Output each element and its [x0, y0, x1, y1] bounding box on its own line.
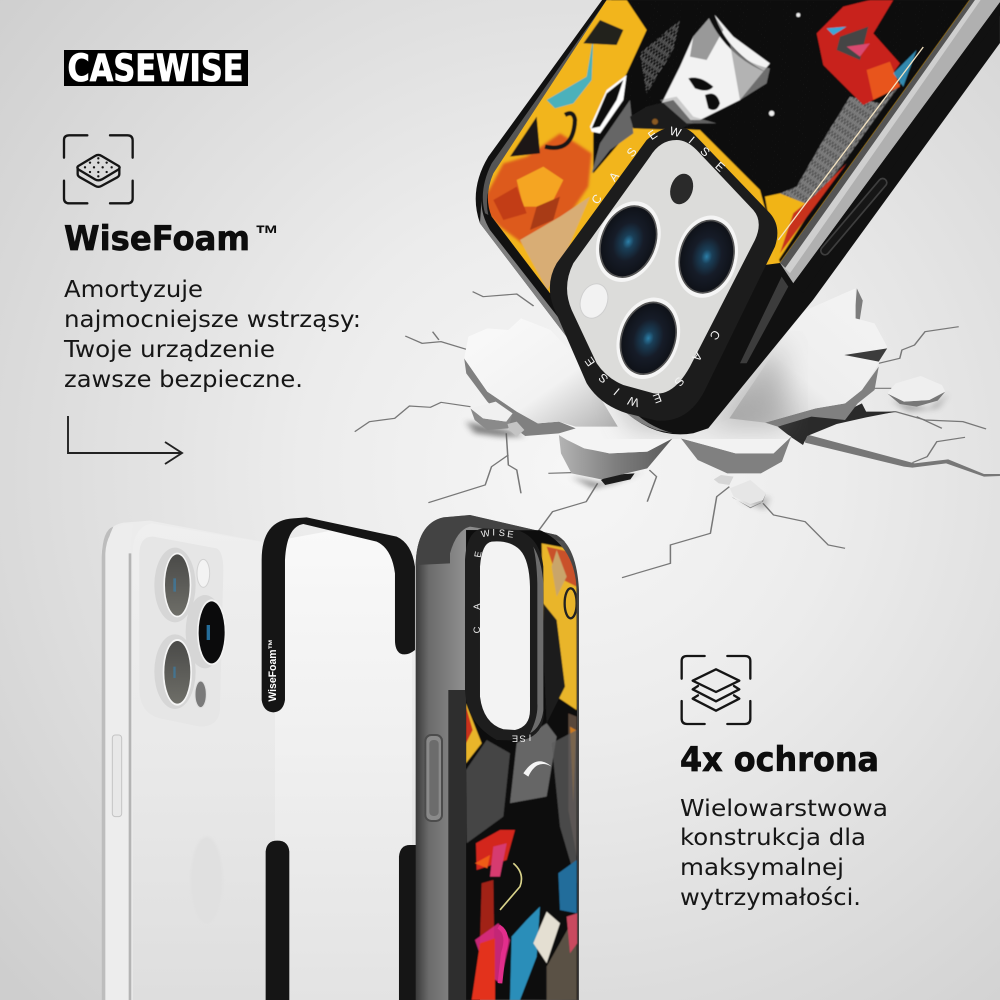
flash [197, 559, 210, 587]
ring lettering: W [480, 528, 491, 539]
heading: WiseFoam: ™ [255, 221, 279, 248]
camera opening [480, 541, 530, 730]
ring lettering: A [689, 349, 705, 364]
ring lettering: I [611, 385, 622, 398]
ring lettering: S [671, 374, 687, 389]
phone frame [102, 521, 277, 1000]
fur [466, 740, 510, 843]
yellow lower right [764, 192, 807, 260]
rocks: bottom [714, 475, 766, 508]
ring lettering: S [498, 528, 505, 538]
ring lettering: S [697, 144, 713, 160]
black glyphs [583, 20, 623, 45]
top colors [542, 543, 577, 710]
ring lettering: W [625, 393, 641, 410]
gorilla body [593, 0, 970, 263]
text block: WiseFoam description: Amortyzuje [64, 277, 203, 303]
ring lettering: E [651, 390, 663, 406]
sensor [195, 681, 206, 708]
crack lines [355, 292, 986, 578]
case body [476, 0, 1000, 434]
dark gap [778, 403, 896, 445]
camera ring [465, 528, 544, 741]
text block: 4x ochrona description [680, 796, 888, 911]
camera bump [139, 537, 223, 727]
ring lettering: C [707, 327, 723, 343]
ring lettering [472, 527, 531, 743]
slab: left [464, 318, 618, 436]
text block: WiseFoam description: Twoje urządzenie [63, 337, 275, 363]
lens: right [186, 595, 226, 668]
orange paint [480, 133, 592, 247]
ring lettering: C [588, 191, 605, 207]
text block: 4x ochrona description: konstrukcja dla [680, 825, 866, 851]
WiseFoam insert [262, 517, 418, 1000]
ring lettering: A [606, 169, 622, 184]
foam label: WiseFoam™ [267, 639, 279, 702]
text block: WiseFoam description: najmocniejsze wstrząsy: [64, 307, 361, 333]
side button [112, 735, 122, 817]
text block: 4x ochrona description: Wielowarstwowa [680, 796, 888, 822]
side bumper highlight [480, 197, 673, 433]
lens: bottom [606, 289, 690, 387]
black case, side view [416, 515, 579, 1000]
transparent case panel [275, 530, 412, 1000]
camera ring [550, 126, 777, 421]
heading: 4x ochrona: 4x ochrona [680, 740, 879, 780]
lower gloss [740, 277, 788, 363]
ring lettering: I [686, 134, 697, 146]
ring lettering: S [624, 145, 640, 160]
text block: WiseFoam description: zawsze bezpieczne. [64, 367, 303, 393]
logo: CASEWISE: CASEWISE [68, 47, 244, 90]
slab: right [729, 288, 887, 427]
gorilla face [660, 13, 770, 120]
arrow [68, 416, 182, 464]
phone back [133, 523, 277, 1000]
side button [825, 183, 883, 251]
red graffiti [817, 0, 900, 105]
white phone, back view [102, 521, 277, 1000]
ring lettering: A [472, 603, 482, 610]
slab: center right [681, 419, 791, 473]
artwork [460, 0, 973, 300]
text block: 4x ochrona description: maksymalnej [680, 855, 844, 881]
lens: lower [154, 634, 196, 709]
icon: stacked layers in scan frame [682, 656, 750, 724]
top phone with graffiti gorilla case [460, 0, 1000, 434]
ring lettering: E [582, 354, 598, 369]
slab: center left [559, 428, 673, 479]
lens: top left [584, 192, 672, 292]
black edge shade [793, 0, 1000, 293]
heading: WiseFoam: WiseFoam [64, 219, 250, 259]
side button [425, 735, 442, 821]
foam band top [262, 517, 415, 712]
graffiti [476, 830, 515, 870]
lens: upper [154, 548, 196, 622]
ring lettering [582, 124, 728, 410]
ring lettering: I [529, 732, 531, 742]
wedge crack [805, 434, 1000, 477]
grey side band [780, 0, 1000, 283]
case frame [416, 515, 579, 1000]
rock: right [887, 376, 945, 407]
phone shadow on wall [610, 340, 790, 430]
cracks in wall [355, 288, 1000, 578]
ring lettering: W [668, 124, 683, 140]
text block: WiseFoam description [63, 277, 361, 393]
ring lettering: E [507, 529, 514, 540]
lens: top right [667, 209, 746, 304]
tan paint [520, 197, 590, 290]
ring lettering: E [512, 733, 518, 743]
ring lettering: E [473, 551, 484, 558]
ring lettering: C [472, 626, 482, 633]
gorilla eye socket [590, 75, 627, 133]
flash [575, 280, 613, 322]
rock: left [470, 402, 524, 437]
ring lettering: S [596, 370, 611, 386]
left colors [466, 703, 482, 763]
artwork [466, 530, 579, 1000]
text block: 4x ochrona description: wytrzymałości. [680, 885, 861, 911]
shadows [466, 393, 948, 510]
foam strip left [266, 841, 289, 1000]
camera bump [567, 140, 759, 394]
icon: foam pad in scan frame [64, 135, 133, 203]
foam strip right [399, 845, 418, 1000]
ring lettering: E [645, 127, 660, 143]
ring lettering: I [492, 527, 495, 537]
teal splash [547, 37, 593, 108]
sensor [666, 171, 697, 207]
ring lettering: E [712, 159, 728, 175]
ring lettering: S [520, 733, 526, 743]
